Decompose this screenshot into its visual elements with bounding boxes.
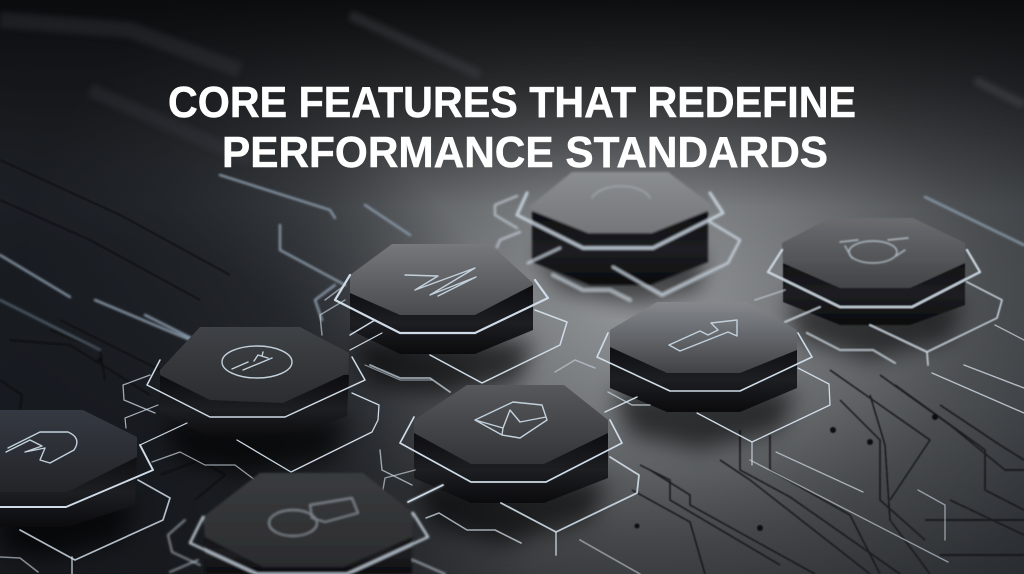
circuit traces: dark lines: [0, 160, 1024, 574]
icon: gear F: [840, 238, 908, 263]
chip G: center chip with envelope icon: [380, 385, 640, 574]
body G: [414, 430, 608, 503]
shadow D: [535, 250, 705, 305]
face G: [414, 385, 608, 464]
outline B: [147, 357, 365, 417]
circuit lines B: [123, 333, 432, 480]
face C: [350, 244, 533, 315]
icon: zigzag C: [405, 268, 476, 296]
body D: [532, 208, 708, 285]
chip H: bottom blurred chip: [168, 473, 445, 574]
icon: gear D: [592, 186, 650, 198]
chip D: top chip (blurred, faint icon): [495, 172, 740, 305]
circuit lines D: [495, 196, 740, 300]
chip B: chip with circular icon: [123, 327, 432, 480]
body F: [783, 255, 965, 325]
body H: [205, 530, 412, 574]
circuit lines E: [555, 325, 1024, 562]
shadow B: [162, 420, 348, 475]
outline D: [517, 193, 723, 248]
chip E: arrow chip: [555, 302, 1024, 562]
icon: chain H: [269, 498, 358, 536]
chip C: center-left chip with zigzag icon: [320, 244, 567, 395]
body A: [0, 450, 137, 527]
left blurred light traces: [0, 175, 1024, 350]
icon: circle B: [222, 346, 292, 378]
circuit lines A: [0, 480, 170, 574]
shadow C: [352, 340, 533, 395]
face F: [782, 218, 965, 288]
chip F: upper right chip: [755, 218, 1002, 365]
shadow G: [416, 480, 608, 545]
face A: [0, 410, 137, 492]
body B: [160, 375, 349, 438]
shadow F: [785, 300, 965, 360]
icon: hand A: [6, 432, 77, 463]
circuit lines G: [380, 450, 640, 574]
face B: [160, 327, 349, 403]
title line 1: CORE FEATURES THAT REDEFINE: [168, 78, 856, 127]
shadow E: [612, 390, 797, 450]
body C: [350, 285, 533, 354]
shadow A: [0, 500, 135, 560]
title line 2: PERFORMANCE STANDARDS: [222, 128, 828, 177]
outline E: [597, 333, 812, 391]
face D: [530, 172, 710, 233]
outline G: [400, 417, 622, 482]
title: [168, 78, 856, 177]
outline A: [0, 445, 153, 507]
face H: [203, 473, 413, 567]
circuit lines H: [168, 485, 445, 574]
outline F: [768, 250, 980, 307]
outline C: [335, 275, 548, 333]
circuit lines F: [755, 282, 1002, 365]
face E: [610, 302, 797, 373]
circuit lines C: [320, 285, 567, 392]
outline H: [190, 513, 428, 574]
icon: envelope G: [475, 402, 547, 438]
body E: [610, 340, 797, 412]
icon: arrow E: [669, 320, 737, 351]
chip A: left chip with hand icon (cropped): [0, 410, 170, 574]
